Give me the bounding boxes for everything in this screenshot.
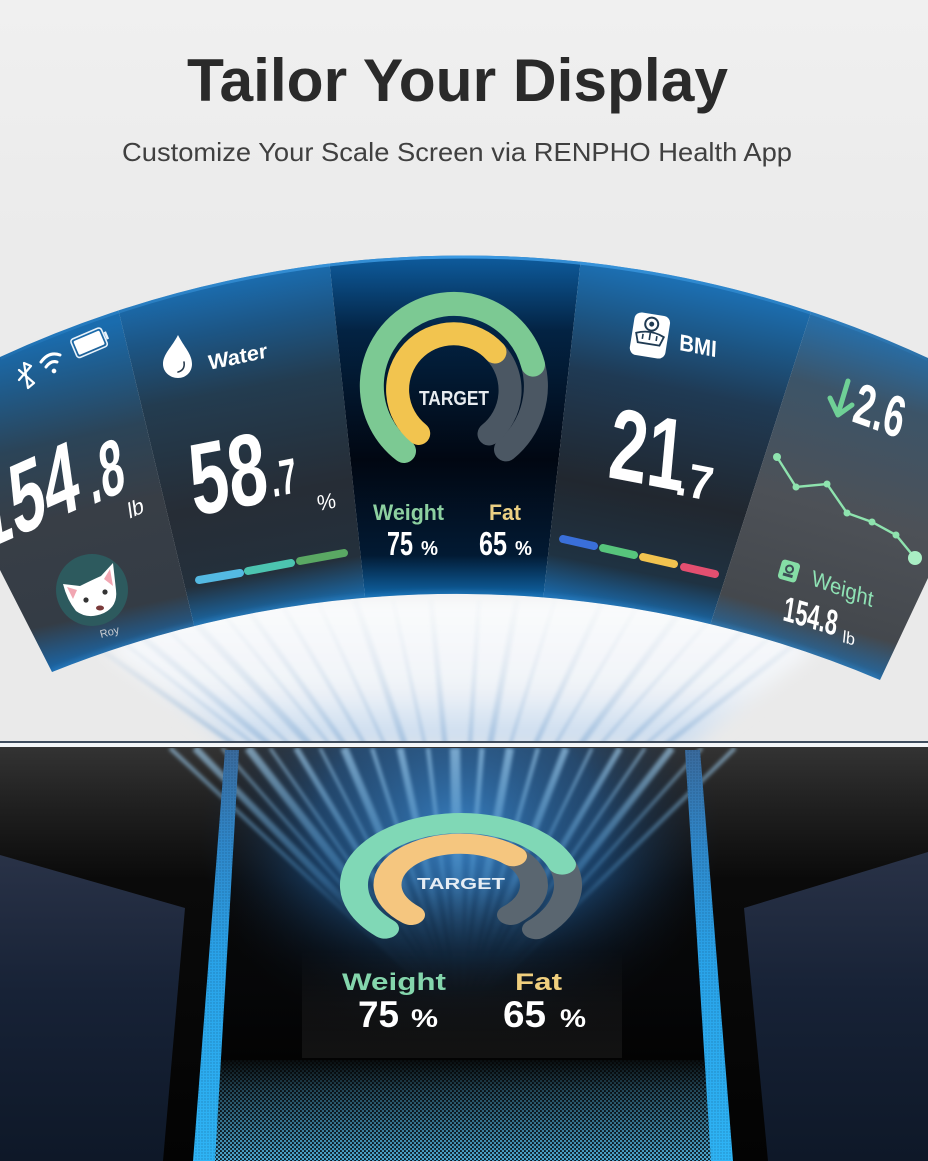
icon: battery <box>70 326 111 358</box>
dotted halftone floor <box>200 1060 730 1161</box>
scale display target label: TARGET <box>417 876 505 893</box>
icon: BMI scale <box>629 311 671 360</box>
weight and fat percentages: 65 <box>479 525 507 562</box>
scale display percentages: 75 <box>358 994 399 1035</box>
weight and fat percentages <box>373 500 532 562</box>
weight trend label and value: Weight <box>810 565 875 612</box>
left blue light strip <box>193 750 239 1161</box>
scale display percentages: 65 <box>503 994 546 1035</box>
icon: wifi <box>41 354 60 373</box>
BMI value 21.7: .7 <box>673 452 717 512</box>
icon: bluetooth <box>19 363 34 388</box>
panel: weight trend background <box>710 312 928 680</box>
weight and fat percentages: Weight <box>373 500 445 525</box>
scale display backing <box>302 950 622 1058</box>
scale body <box>0 747 928 1161</box>
icon: water drop <box>163 335 192 378</box>
scale display percentages <box>342 969 586 1035</box>
title: Tailor Your Display <box>187 47 729 114</box>
icon: small weight scale <box>777 559 801 583</box>
BMI range bars <box>563 539 715 574</box>
scale display percentages: Fat <box>515 969 562 996</box>
weight and fat percentages: % <box>515 538 532 560</box>
blue light glow on scale <box>167 748 738 1002</box>
weight and fat percentages: 75 <box>387 525 413 562</box>
weight value 154.8 lb: .8 <box>82 419 129 522</box>
panel: profile weight background <box>0 310 194 672</box>
icon: down arrow <box>830 381 852 415</box>
line chart: weight trend <box>773 453 922 565</box>
target label: TARGET <box>419 388 489 410</box>
BMI label: BMI <box>679 329 717 362</box>
panel: BMI background <box>543 262 812 624</box>
gauge: target rings <box>372 304 536 451</box>
scale display percentages: % <box>560 1005 586 1033</box>
weight trend label and value: lb <box>842 627 856 650</box>
weight and fat percentages: % <box>421 538 438 560</box>
water value 58.7 %: .7 <box>268 447 300 508</box>
light beams above scale <box>114 594 805 741</box>
panel: water background <box>118 264 366 626</box>
panel: target background <box>330 256 580 598</box>
water value 58.7 %: 58 <box>183 410 273 538</box>
left navy foot panel <box>0 855 185 1161</box>
scale edge line <box>0 741 928 747</box>
right blue light strip <box>685 750 733 1161</box>
gauge: scale display target rings <box>354 823 568 929</box>
scale display percentages: Weight <box>342 969 446 996</box>
scale display percentages: % <box>411 1005 438 1033</box>
weight trend label and value <box>781 565 875 650</box>
water progress bars <box>199 553 344 580</box>
subtitle: Customize Your Scale Screen via RENPHO Health App <box>122 137 792 167</box>
weight and fat percentages: Fat <box>489 500 522 525</box>
curved screen carousel <box>0 240 928 700</box>
avatar: cat Roy: Roy <box>99 624 121 641</box>
water label: Water <box>207 340 268 375</box>
avatar: cat Roy <box>56 554 128 641</box>
BMI value 21.7: 21 <box>605 386 691 513</box>
weight trend label and value: 154.8 <box>781 589 840 644</box>
weight value 154.8 lb: lb <box>126 492 145 524</box>
water value 58.7 %: % <box>316 488 337 516</box>
right navy foot panel <box>744 852 928 1161</box>
